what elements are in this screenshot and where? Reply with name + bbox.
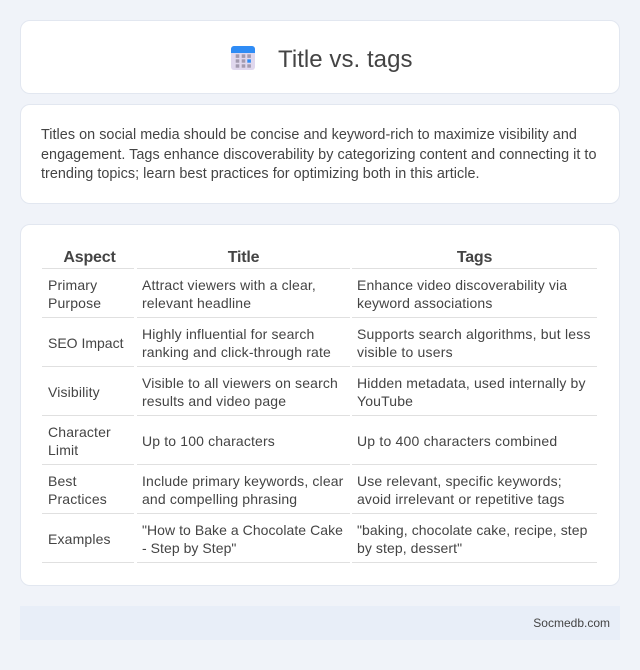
intro text: trending topics; learn best practices for optimizing both in this article. (41, 166, 480, 182)
cell: Primary Purpose tags (357, 277, 568, 311)
cell: SEO Impact title: ranking and click-through rate (142, 344, 331, 360)
column header: Tags: Tags (457, 249, 492, 266)
cell: Examples title: - Step by Step" (142, 540, 236, 556)
cell: SEO Impact title: Highly influential for search (142, 326, 314, 342)
cell: Best Practices title: Include primary keywords, clear (142, 473, 344, 489)
cell: Examples tags (357, 522, 588, 556)
cell: Primary Purpose: Primary (48, 277, 97, 293)
cell: Primary Purpose: Purpose (48, 295, 101, 311)
cell: Primary Purpose tags: keyword associations (357, 295, 492, 311)
cell: Best Practices tags: avoid irrelevant or repetitive tags (357, 491, 565, 507)
panel: comparison table card (20, 224, 620, 586)
column header: Aspect: Aspect (63, 249, 116, 266)
cell: Visibility tags (357, 375, 586, 409)
cell: Primary Purpose title: Attract viewers with a clear, (142, 277, 316, 293)
intro text: engagement. Tags enhance discoverability by categorizing content and connecting it to (41, 146, 597, 162)
footer text: Socmedb.com (533, 616, 610, 630)
cell: Examples title (142, 522, 343, 556)
cell: SEO Impact: SEO Impact (48, 335, 123, 351)
column header: Title: Title (228, 249, 259, 266)
panel: introduction (20, 104, 620, 204)
icon: calendar (231, 46, 255, 70)
cell: Primary Purpose (48, 277, 101, 311)
cell: Primary Purpose tags: Enhance video discoverability via (357, 277, 567, 293)
footer bar (20, 606, 620, 640)
cell: Primary Purpose title: relevant headline (142, 295, 251, 311)
heading: Title vs. tags (278, 46, 413, 73)
intro text: Titles on social media should be concise and keyword-rich to maximize visibility and (41, 127, 577, 143)
cell: SEO Impact title (142, 326, 331, 360)
cell: Visibility: Visibility (48, 384, 100, 400)
cell: Best Practices tags: Use relevant, specific keywords; (357, 473, 562, 489)
cell: SEO Impact tags (357, 326, 591, 360)
cell: Examples tags: "baking, chocolate cake, recipe, step (357, 522, 588, 538)
cell: Best Practices (48, 473, 107, 507)
cell: Best Practices tags (357, 473, 565, 507)
cell: Best Practices title: and compelling phrasing (142, 491, 297, 507)
cell: Character Limit: Limit (48, 442, 78, 458)
cell: SEO Impact tags: Supports search algorithms, but less (357, 326, 591, 342)
cell: SEO Impact tags: visible to users (357, 344, 453, 360)
cell: Examples tags: by step, dessert" (357, 540, 462, 556)
cell: Character Limit tags: Up to 400 characters combined (357, 433, 557, 449)
cell: Examples: Examples (48, 531, 111, 547)
cell: Visibility title (142, 375, 338, 409)
cell: Examples title: "How to Bake a Chocolate Cake (142, 522, 343, 538)
cell: Best Practices title (142, 473, 344, 507)
cell: Visibility tags: Hidden metadata, used internally by (357, 375, 586, 391)
cell: Best Practices: Best (48, 473, 77, 489)
cell: Best Practices: Practices (48, 491, 107, 507)
cell: Character Limit title: Up to 100 characters (142, 433, 275, 449)
cell: Primary Purpose title (142, 277, 316, 311)
intro text (41, 127, 597, 182)
panel: title header (20, 20, 620, 94)
cell: Character Limit: Character (48, 424, 111, 440)
cell: Visibility title: Visible to all viewers on search (142, 375, 338, 391)
cell: Visibility tags: YouTube (357, 393, 413, 409)
cell: Character Limit (48, 424, 111, 458)
cell: Visibility title: results and video page (142, 393, 286, 409)
table (42, 249, 597, 563)
